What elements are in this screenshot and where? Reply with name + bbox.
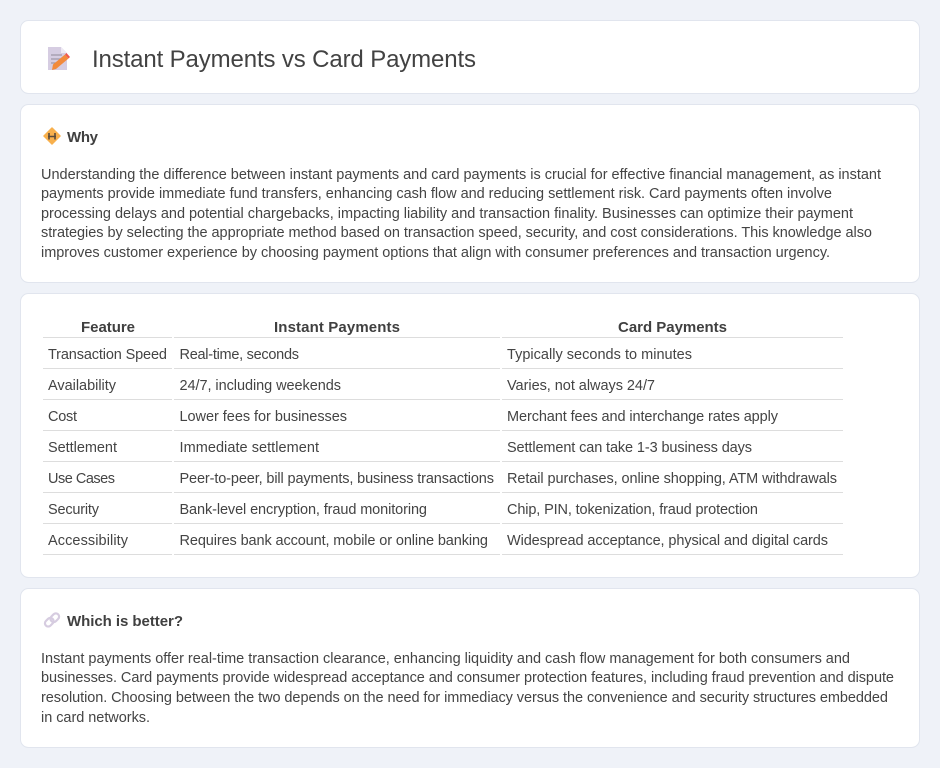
text block: why explanation: Understanding the difference between instant payments and card payments is crucial for effective financial management, as instant <box>41 167 881 183</box>
text block: why explanation: improves customer experience by choosing payment options that align with consumer preferences and transaction urgency. <box>41 245 830 261</box>
text block: why explanation <box>41 167 881 261</box>
text block: why explanation: strategies by selecting the appropriate method based on transaction speed, security, and cost considerations. This knowledge also <box>41 225 872 241</box>
row: accessibility: Accessibility <box>48 533 129 549</box>
icon: chain link <box>44 612 60 628</box>
table header: Feature <box>81 319 135 336</box>
row: cost: Merchant fees and interchange rates apply <box>507 409 779 425</box>
table header: Card Payments <box>618 319 727 336</box>
row: transaction speed <box>43 347 843 368</box>
row: use cases: Peer-to-peer, bill payments, business transactions <box>180 471 494 487</box>
text block: why explanation: payments provide immediate fund transfers, enhancing cash flow and reducing settlement risk. Card payments often involve <box>41 186 832 202</box>
heading: why: Why <box>67 129 99 146</box>
row: availability: Varies, not always 24/7 <box>507 378 655 394</box>
row: availability <box>43 378 843 400</box>
row: availability: Availability <box>48 378 117 394</box>
row: security: Security <box>48 502 100 518</box>
row: use cases <box>43 471 843 492</box>
row: security <box>43 502 843 524</box>
row: settlement <box>43 440 843 462</box>
panel: comparison table <box>20 294 920 578</box>
row: accessibility: Widespread acceptance, physical and digital cards <box>507 533 828 549</box>
row: availability: 24/7, including weekends <box>180 378 341 394</box>
row: accessibility <box>43 533 843 554</box>
row: cost: Cost <box>48 409 77 425</box>
icon: document with pencil <box>48 47 70 70</box>
table header <box>43 319 843 338</box>
row: transaction speed: Typically seconds to minutes <box>507 347 692 363</box>
panel: header <box>20 20 920 94</box>
icon: warning diamond <box>44 128 60 144</box>
row: settlement: Settlement can take 1-3 business days <box>507 440 752 456</box>
row: security: Bank-level encryption, fraud monitoring <box>180 502 427 518</box>
row: use cases: Retail purchases, online shopping, ATM withdrawals <box>507 471 837 487</box>
row: cost: Lower fees for businesses <box>180 409 347 425</box>
panel: why <box>20 104 920 282</box>
panel: which is better <box>20 588 920 748</box>
text block: verdict <box>41 651 894 726</box>
row: security: Chip, PIN, tokenization, fraud protection <box>507 502 758 518</box>
row: settlement: Immediate settlement <box>180 440 319 456</box>
text block: verdict: in card networks. <box>41 710 150 726</box>
row: transaction speed: Transaction Speed <box>48 347 167 363</box>
text block: verdict: Instant payments offer real-time transaction clearance, enhancing liquidity and cash flow management for both consumers and <box>41 651 850 667</box>
row: transaction speed: Real-time, seconds <box>180 347 299 363</box>
heading: which is better: Which is better? <box>67 613 183 630</box>
row: use cases: Use Cases <box>48 471 115 487</box>
row: settlement: Settlement <box>48 440 117 456</box>
title: Instant Payments vs Card Payments <box>92 46 476 73</box>
table header: Instant Payments <box>274 319 400 336</box>
text block: why explanation: processing delays and potential chargebacks, impacting liability and transaction finality. Businesses can optimize their payment <box>41 206 853 222</box>
row: cost <box>43 409 843 430</box>
text block: verdict: resolution. Choosing between the two depends on the need for immediacy versus the convenience and security structures embedded <box>41 690 888 706</box>
text block: verdict: businesses. Card payments provide widespread acceptance and consumer protection features, including fraud prevention and dispute <box>41 670 894 686</box>
row: accessibility: Requires bank account, mobile or online banking <box>180 533 488 549</box>
